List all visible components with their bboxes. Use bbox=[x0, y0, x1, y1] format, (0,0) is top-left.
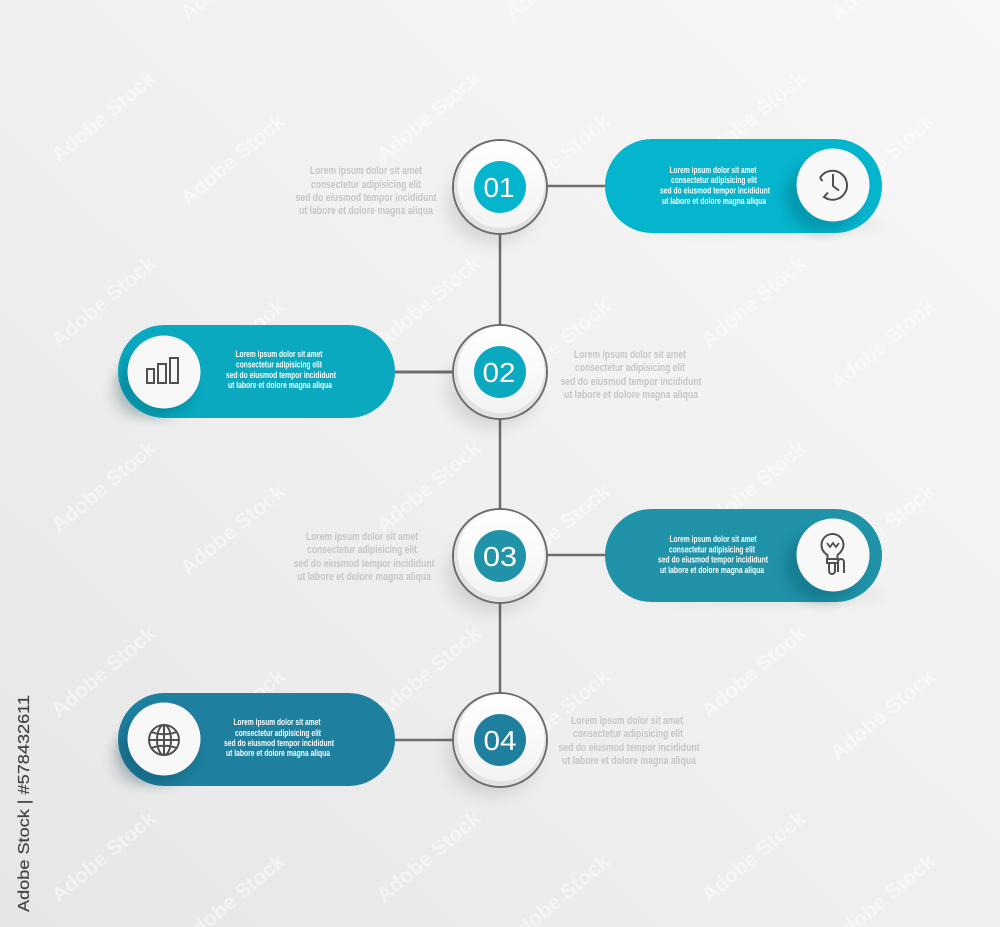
pill 02: ut labore et dolore magna aliqua bbox=[228, 380, 333, 390]
pill 03: ut labore et dolore magna aliqua bbox=[660, 565, 765, 575]
pill 02: Lorem ipsum dolor sit amet bbox=[236, 349, 322, 359]
icon: clock history bbox=[820, 171, 847, 200]
pill 02: consectetur adipisicing elit bbox=[236, 360, 322, 370]
connector 01 bbox=[546, 185, 610, 187]
number badge 03 bbox=[448, 509, 547, 611]
step 01 row bbox=[296, 139, 885, 242]
vertical timeline connector bbox=[499, 232, 501, 694]
side credit text: Adobe Stock | #578432611 bbox=[16, 695, 33, 912]
step 04 row bbox=[110, 693, 700, 795]
pill 04: consectetur adipisicing elit bbox=[235, 728, 321, 738]
number badge 01 bbox=[448, 140, 547, 242]
connector 03 bbox=[546, 554, 610, 556]
grey text block 03: ut labore et dolore magna aliqua bbox=[297, 571, 432, 583]
number badge 04 bbox=[448, 693, 547, 795]
grey text block 02: Lorem ipsum dolor sit amet bbox=[574, 349, 686, 361]
icon: globe bbox=[149, 725, 179, 755]
number badge 01: 01 bbox=[484, 172, 514, 203]
grey text block 03: Lorem ipsum dolor sit amet bbox=[306, 531, 418, 543]
pill 02: sed do eiusmod tempor incididunt bbox=[226, 370, 336, 380]
icon: light bulb bbox=[822, 534, 844, 574]
grey text block 01: ut labore et dolore magna aliqua bbox=[299, 205, 434, 217]
grey text block 04: consectetur adipisicing elit bbox=[573, 728, 683, 740]
pill 04: Lorem ipsum dolor sit amet bbox=[234, 717, 320, 727]
grey text block 02 bbox=[560, 349, 702, 401]
number badge 02: 02 bbox=[482, 357, 516, 388]
pill 03 bbox=[605, 509, 885, 604]
connector 04 bbox=[390, 739, 454, 741]
pill 01: ut labore et dolore magna aliqua bbox=[662, 196, 767, 206]
number badge 03: 03 bbox=[483, 541, 517, 572]
pill 01: sed do eiusmod tempor incididunt bbox=[660, 186, 770, 196]
grey text block 04: ut labore et dolore magna aliqua bbox=[562, 755, 697, 767]
icon: bar chart bbox=[147, 358, 178, 383]
grey text block 03: consectetur adipisicing elit bbox=[307, 544, 417, 556]
grey text block 01: Lorem ipsum dolor sit amet bbox=[310, 165, 422, 177]
grey text block 04: Lorem ipsum dolor sit amet bbox=[571, 715, 683, 727]
grey text block 01: consectetur adipisicing elit bbox=[311, 179, 421, 191]
grey text block 01: sed do eiusmod tempor incididunt bbox=[296, 192, 437, 204]
pill 01: consectetur adipisicing elit bbox=[671, 175, 757, 185]
pill 04: sed do eiusmod tempor incididunt bbox=[224, 738, 334, 748]
pill 01 bbox=[605, 139, 885, 235]
number badge 02 bbox=[448, 325, 547, 427]
grey text block 02: sed do eiusmod tempor incididunt bbox=[560, 376, 702, 388]
grey text block 04: sed do eiusmod tempor incididunt bbox=[558, 742, 700, 754]
grey text block 03: sed do eiusmod tempor incididunt bbox=[294, 558, 435, 570]
step 02 row bbox=[110, 325, 702, 427]
pill 02 bbox=[110, 325, 395, 419]
number badge 04: 04 bbox=[484, 725, 516, 756]
grey text block 02: consectetur adipisicing elit bbox=[575, 362, 685, 374]
grey text block 01 bbox=[296, 165, 437, 217]
grey text block 03 bbox=[294, 531, 435, 583]
grey text block 02: ut labore et dolore magna aliqua bbox=[564, 389, 699, 401]
pill 04 bbox=[110, 693, 395, 787]
pill 03: consectetur adipisicing elit bbox=[669, 544, 755, 554]
grey text block 04 bbox=[558, 715, 700, 767]
step 03 row bbox=[294, 509, 885, 611]
pill 03: sed do eiusmod tempor incididunt bbox=[658, 554, 768, 564]
pill 01: Lorem ipsum dolor sit amet bbox=[670, 165, 756, 175]
pill 04: ut labore et dolore magna aliqua bbox=[226, 748, 331, 758]
pill 03: Lorem ipsum dolor sit amet bbox=[670, 534, 756, 544]
connector 02 bbox=[390, 370, 454, 374]
